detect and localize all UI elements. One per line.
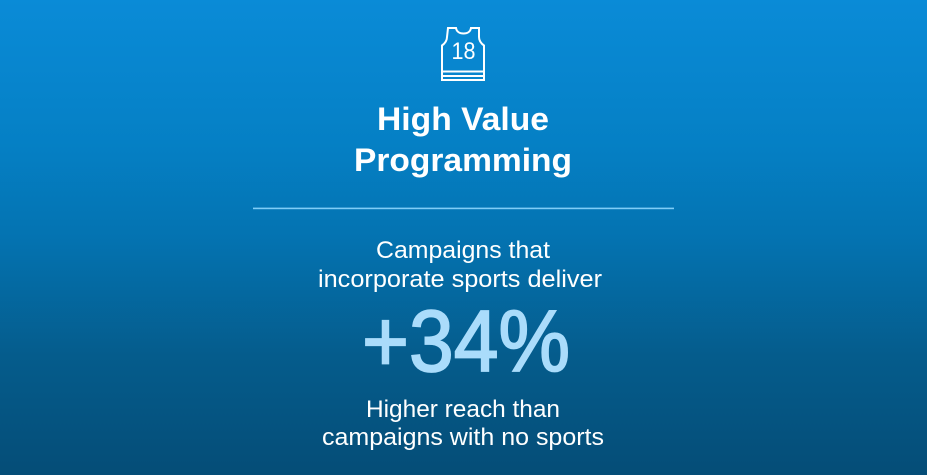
text block: intro: incorporate sports deliver (318, 266, 602, 293)
heading: High Value Programming (354, 101, 572, 178)
text block: conclusion (322, 396, 604, 451)
divider line (253, 208, 674, 209)
heading: High Value Programming: Programming (354, 142, 572, 178)
text block: conclusion: Higher reach than (366, 396, 560, 423)
text block: conclusion: campaigns with no sports (322, 424, 604, 451)
text block: intro (318, 237, 602, 293)
big stat: +34%: +34% (362, 293, 570, 390)
heading: High Value Programming: High Value (377, 101, 549, 137)
text block: intro: Campaigns that (376, 237, 550, 264)
icon: basketball jersey number 18: 18 (452, 38, 476, 65)
icon: basketball jersey number 18 (442, 28, 484, 80)
